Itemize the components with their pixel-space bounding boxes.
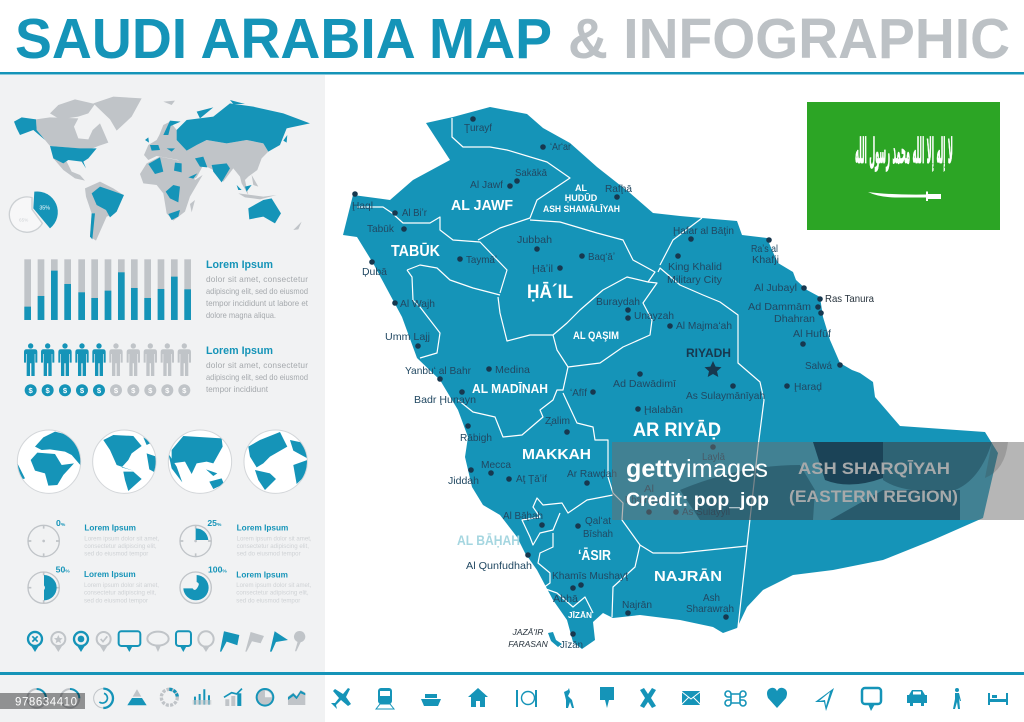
people text: adipiscing elit, sed do eiusmod [206,372,308,382]
city labels: Al Qunfudhah [466,560,532,572]
bar chart text: tempor incididunt ut labore et [206,298,309,308]
people icons: $ [148,386,153,395]
region labels [391,183,722,620]
people icons: $ [165,386,170,395]
panel: left sidebar background [0,75,325,722]
globe: Americas [93,430,157,493]
icon: plane [331,688,351,709]
region labels: AL QAŞIM [573,330,619,342]
dial 100%: Lorem Ipsum [236,569,288,579]
icon: square pin [176,631,191,652]
dial 0%: 0% [56,518,66,528]
city labels: Al Majmaʻah [676,320,732,332]
people icons: $ [114,386,119,395]
watermark text [626,455,769,511]
icon: command symbol [725,691,746,706]
city labels: Ar Rawḑah [567,468,617,480]
city labels: Jīzān [560,639,583,651]
region labels: ḤĀ´IL [527,282,573,303]
watermark text: Credit: pop_jop [626,490,769,511]
icon: mail [682,691,700,705]
panel: world map [9,97,310,241]
icon: deer [564,688,574,708]
region labels: NAJRĀN [654,568,722,585]
icon: gray map pin [294,631,305,651]
dial 25% [180,518,312,558]
city labels: ʻAfīf [570,387,587,399]
region labels: AL MADĪNAH [472,381,548,396]
people text [206,345,308,394]
people icons: $ [131,386,136,395]
city labels: Mecca [481,459,511,471]
city labels: Ash [703,592,720,604]
label: Farasan: JAZĀ'IR [512,627,543,637]
city labels: Al Jawf [470,179,503,191]
city labels: As Sulayyil [682,506,730,518]
city labels: Al Biʼr [402,207,427,219]
globe: Africa [17,430,82,493]
panel: travel icons row [331,687,1008,711]
flag sword [868,192,941,201]
city dots [352,116,843,637]
icon: square pin [600,687,614,708]
region labels: ʻĀSIR [578,547,611,564]
city labels: Al [644,483,654,495]
bar chart text: dolor sit amet, consectetur [206,274,308,284]
region labels: TABŪK [391,243,441,260]
city labels: Ḩaraḑ [794,381,822,393]
watermark text: images [686,455,768,483]
icon: house [468,688,488,707]
city labels: Salwá [805,360,832,372]
icon: pyramid [127,689,147,705]
dial 25%: Lorem ipsum dolor sit amet, [237,536,312,542]
city labels: Rafḩā [605,183,632,195]
title: SAUDI ARABIA MAP [15,7,552,71]
dial 50%: Lorem Ipsum [84,569,136,579]
icon: car [907,690,927,706]
icon: gray flag [245,632,264,652]
city labels: As Sulaymānīyah [686,390,765,402]
icon: oval bubble [147,632,169,652]
region label: Ash Sharqiyah: ASH SHARQĪYAH [798,459,950,478]
dial 50%: sed do eiusmod tempor [84,598,148,604]
icon: triangular flag [270,631,288,652]
city labels: Al Jubayl [754,282,797,294]
pie chart: 35% [9,191,58,232]
city labels: Aţ Ţāʼif [516,473,547,485]
icon: growth bars [224,689,242,706]
watermark: getty strip [612,442,1024,520]
city labels: Tabūk [367,223,395,235]
dial 25%: Lorem Ipsum [237,522,288,532]
city labels: Al Bāḩah [503,510,543,522]
flag of Saudi Arabia [807,102,1000,230]
city labels: Dhahran [774,313,815,325]
icon: dotted equalizer [193,689,211,705]
dial 0%: consectetur adipiscing elit, [84,544,157,550]
icon: ring pin [198,631,214,652]
region labels: AL JAWF [451,197,513,214]
panel: dial charts [28,518,312,604]
city labels: Medina [495,364,530,376]
dial 0% [28,518,160,558]
city labels: Qalʻat [585,515,611,527]
city labels: Badr Ḩunayn [414,394,476,406]
map landmass [343,107,998,649]
city labels: Ţurayf [464,122,492,134]
globe: Atlantic [244,430,307,493]
dial 100%: 100% [208,565,227,575]
city labels: Buraydah [596,296,640,308]
people icons: $ [80,386,85,395]
city labels: Taymāʼ [466,254,497,266]
panel: people pictogram [24,343,308,396]
dial 100% [180,565,312,604]
bars [24,259,191,320]
people icons: $ [63,386,68,395]
city labels: Military City [667,274,723,286]
dial 0%: Lorem ipsum dolor sit amet, [84,536,160,542]
panel: globes [17,430,307,493]
city labels: Khamāsīn [625,494,667,506]
region labels: MAKKAH [522,446,591,463]
icon: arc gauge 1 [27,689,46,708]
city labels: Ḩafar al Bāţin [673,225,734,237]
dial 50%: consectetur adipiscing elit, [84,591,157,597]
watermark text: getty [626,455,686,483]
watermark: image id [0,693,85,709]
city labels: Khafji [752,254,779,266]
capital label: Riyadh: RIYADH [686,346,731,360]
people text: Lorem Ipsum [206,345,273,357]
people icons [24,343,191,396]
dial 0%: sed do eiusmod tempor [84,552,148,558]
label: Farasan [508,627,549,649]
watermark: image id: 978634410 [15,696,77,708]
city labels: Rābigh [460,432,492,444]
city labels: Ḩalabān [644,404,683,416]
city labels: Sharawrah [686,603,734,615]
city labels: Baqʻāʼ [588,251,615,263]
dial 25%: 25% [207,518,222,528]
label: Farasan: FARASAN [508,639,549,649]
label: Ras Tanura outside map: Ras Tanura [825,293,874,305]
city labels: Bīshah [583,528,613,540]
people icons: $ [46,386,51,395]
title: & INFOGRAPHIC [568,7,1010,71]
map of Saudi Arabia [343,107,998,651]
pie chart: 35%: 65% [19,217,28,222]
region labels: ḤUDŪD [565,193,598,203]
icon: pie [256,688,274,707]
world map land gray [36,97,302,241]
city labels: Umm Lajj [385,331,430,343]
city labels: Laylā [702,451,725,463]
dial 25%: consectetur adipiscing elit, [237,544,309,550]
region labels: AL [575,183,587,193]
dial 50%: Lorem ipsum dolor sit amet, [84,583,159,589]
region labels: AR RIYĀḌ [633,420,721,441]
city labels: Sakākā [515,167,547,179]
bar chart text: dolore magna aliqua. [206,310,276,320]
region label: Ash Sharqiyah: (EASTERN REGION) [789,487,958,506]
people icons: $ [97,386,102,395]
watermark swirl shapes [680,442,1008,520]
icon: star pin [51,632,65,652]
icon: cutlery [516,690,537,707]
city labels: Ad Dammām [748,301,811,313]
city labels: Jubbah [517,234,552,246]
dial 100%: consectetur adipiscing elit, [236,591,309,597]
city labels: Abhā [553,593,578,605]
city labels: Yanbuʻ al Bahr [405,365,471,377]
icon: check pin [97,632,111,652]
icon: capital star [704,361,722,377]
panel: pins and flags row [28,631,305,652]
icon: target pin [74,632,88,652]
people text: tempor incididunt [206,384,269,394]
city labels: Ad Dawādimī [613,378,676,390]
icon: dashed ring [161,689,177,705]
region labels: ASH SHAMĀLĪYAH [543,204,620,214]
icon: train [376,688,394,709]
city labels: ʻArʻar [550,141,571,153]
icon: speech bubble [862,688,881,711]
region labels: JĪZĀN [568,610,592,620]
people icons: $ [182,386,187,395]
icon: arc gauge 2 [61,689,79,708]
city labels: Unayzah [634,310,674,322]
city labels: Ḑubā [362,266,387,278]
panel: stacked bar chart [24,259,309,320]
header rule [0,72,1024,74]
icon: walking person [953,688,961,709]
island: Farasan [548,632,562,647]
city labels: Ḩaql [352,200,373,212]
icon: cross pin [28,632,42,652]
region borders [357,118,764,627]
city labels: Ḩāʼil [532,263,553,275]
dial 0%: Lorem Ipsum [84,522,136,532]
title [15,7,1010,71]
city labels: Jiddah [448,475,479,487]
icon: cross [640,688,656,708]
icon: speech box [119,631,140,652]
bar chart text: adipiscing elit, sed do eiusmod [206,286,308,296]
label: Al Bahah outside map: AL BĀḤAH [457,532,520,548]
icon: concentric arcs [94,689,113,708]
panel: chart icons row [27,688,305,708]
globe: Asia [168,430,232,493]
region label: Ash Sharqiyah [789,459,958,506]
people text: dolor sit amet, consectetur [206,360,308,370]
icon: heart [767,688,787,708]
city labels: Raʼs al [751,243,778,255]
city labels: Z̧alim [545,415,570,427]
icon: navigation arrow [815,688,834,711]
dial 100%: Lorem ipsum dolor sit amet, [236,583,312,589]
dial 100%: sed do eiusmod tempor [236,598,300,604]
flag inscription: لا إله إلا الله محمد رسول الله [855,131,953,173]
bar chart text [206,259,309,320]
dial 50%: 50% [56,565,70,575]
city labels: Al Hufūf [793,328,831,340]
icon: area chart [288,690,305,705]
city labels: King Khalid [668,261,722,273]
city labels: Khamīs Mushayţ [552,570,628,582]
bar chart text: Lorem Ipsum [206,259,273,271]
people icons: $ [29,386,34,395]
pie chart: 35%: 35% [39,206,50,212]
bottom rule [0,672,1024,675]
dial 25%: sed do eiusmod tempor [237,552,301,558]
city labels [352,122,832,651]
icon: bed [988,693,1008,705]
icon: ship [421,694,441,706]
icon: teal flag [220,631,239,652]
city labels: Al Wajh [400,298,435,310]
city labels: Najrān [622,599,652,611]
world map highlighted countries [14,100,310,239]
dial 50% [28,565,159,604]
